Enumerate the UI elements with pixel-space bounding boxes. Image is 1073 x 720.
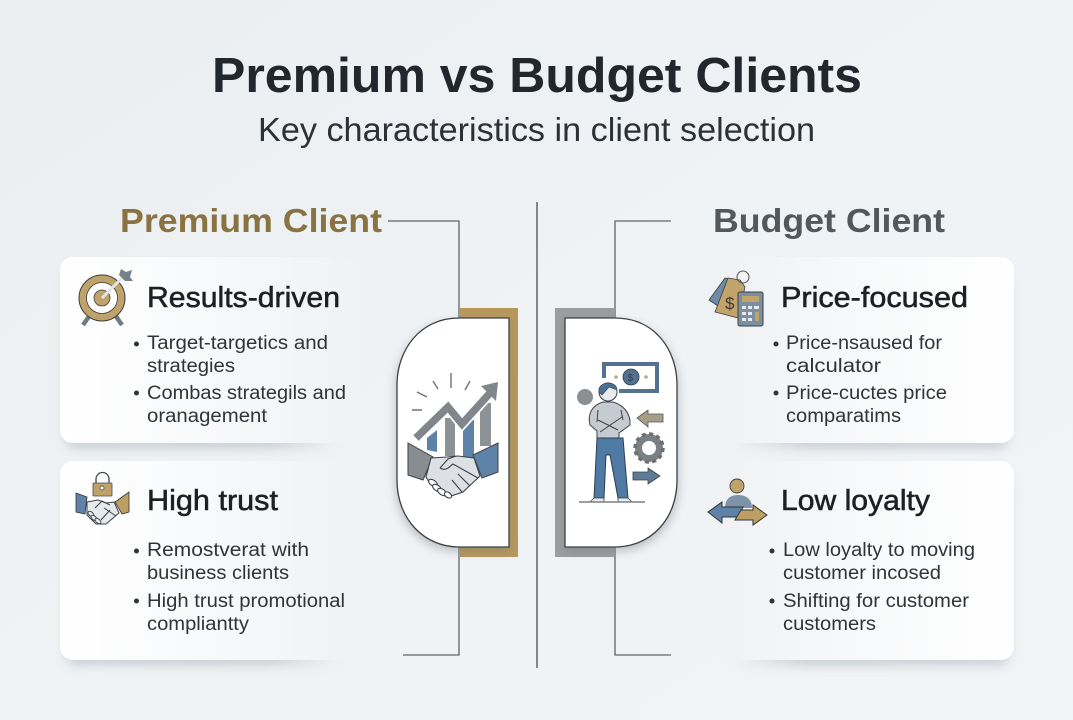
connector: premium (388, 221, 459, 655)
panel: high trust (60, 461, 360, 666)
bullet list: Price-nsaused for (786, 333, 943, 354)
bullet list: Low loyalty to moving (783, 540, 975, 561)
gold frame (459, 308, 518, 557)
center divider line (536, 202, 538, 668)
panel: price-focused (709, 257, 1014, 449)
heading: budget client: Budget Client (713, 202, 945, 239)
bullet list: Price-cuctes price (786, 383, 947, 404)
white panel (565, 318, 677, 547)
bullet list (134, 540, 345, 635)
bullet list: compliantty (147, 614, 250, 635)
bullet list: Combas strategils and (147, 383, 346, 404)
icon: handshake with lock (76, 473, 129, 525)
panel: low loyalty (708, 461, 1014, 666)
center panel: premium (396, 308, 518, 557)
heading: premium client: Premium Client (120, 202, 382, 239)
heading: high trust: High trust (147, 485, 278, 517)
heading: results-driven: Results-driven (147, 282, 340, 314)
icon: person with money, gear and arrows: $ (628, 373, 634, 384)
icon: person with money, gear and arrows (577, 364, 663, 502)
center panel: budget (555, 308, 678, 557)
bullet list: customers (783, 614, 876, 635)
bullet list: oranagement (147, 406, 268, 427)
icon: price tags and calculator: $ (725, 294, 735, 313)
heading: price-focused: Price-focused (781, 282, 968, 314)
bullet list (134, 333, 346, 427)
bullet list: comparatims (786, 406, 901, 427)
gray frame (555, 308, 615, 557)
white panel (397, 318, 509, 547)
subtitle: Key characteristics in client selection (258, 111, 815, 148)
heading: low loyalty: Low loyalty (781, 485, 931, 517)
title: Premium vs Budget Clients (212, 49, 862, 103)
icon: target with arrow (79, 269, 133, 325)
connector: budget (615, 221, 671, 655)
bullet list: business clients (147, 563, 289, 584)
bullet list: calculator (786, 356, 882, 377)
bullet list: High trust promotional (147, 591, 345, 612)
bullet list: Shifting for customer (783, 591, 970, 612)
bullet list: Remostverat with (147, 540, 309, 561)
icon: person with swap arrows (708, 479, 767, 525)
bullet list: strategies (147, 356, 235, 377)
bullet list (770, 540, 975, 635)
bullet list: customer incosed (783, 563, 941, 584)
icon: price tags and calculator (709, 271, 763, 326)
bullet list (774, 333, 947, 427)
bullet list: Target-targetics and (147, 333, 328, 354)
panel: results-driven (60, 257, 360, 449)
icon: growth chart with handshake (408, 373, 498, 499)
